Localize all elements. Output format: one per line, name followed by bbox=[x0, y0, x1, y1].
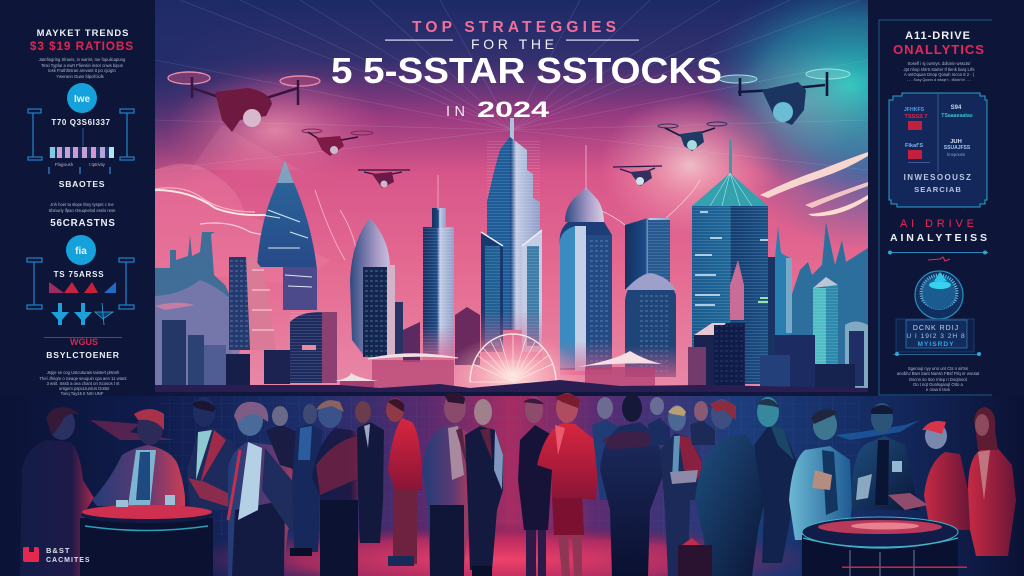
back wall bbox=[0, 396, 1024, 576]
bracket right lower bbox=[119, 258, 134, 309]
drone: small pink bbox=[302, 129, 373, 156]
panel: right sidebar bbox=[879, 20, 992, 395]
heading: ai drive lower: AI DRIVE bbox=[900, 218, 974, 230]
label: sbaotes: SBAOTES bbox=[59, 179, 105, 189]
icon: cyan badge two: fia bbox=[75, 246, 87, 257]
dome pavilion left bbox=[335, 354, 458, 391]
heading: market trends: MAYKET TRENDS bbox=[37, 27, 129, 38]
bracket right bbox=[120, 109, 134, 160]
person: background woman bbox=[648, 397, 670, 445]
chart labels: Ffajyoush bbox=[55, 162, 74, 167]
text block: analytics intro: Jpt nhop shtrtr starter tf tlenk barq Lrfs bbox=[904, 67, 974, 72]
title line: for the: FOR THE bbox=[471, 36, 554, 52]
wall grid bbox=[160, 396, 860, 536]
icon: holographic orb bbox=[915, 271, 963, 319]
title line: in: IN bbox=[446, 104, 465, 120]
text block: market intro: tosk Frathltrsran arevant tt po cjcigtn bbox=[48, 68, 117, 73]
logo: best caemites bbox=[23, 546, 91, 564]
arrow icons bbox=[51, 303, 113, 325]
building: dome tower bbox=[350, 218, 420, 362]
person: man behind with dark suit bbox=[355, 401, 384, 543]
card right stats: S94 bbox=[951, 105, 962, 111]
heading: ratios: $3 $19 RATIOBS bbox=[30, 39, 134, 53]
text block: analysis note: Sgenoqi nyy unn unt Cts n sirtns bbox=[908, 366, 968, 371]
card left stats: Fikaf'S bbox=[905, 143, 923, 149]
building: mid-right towers bbox=[625, 218, 676, 377]
heading: onallytics: ONALLYTICS bbox=[893, 42, 985, 57]
person: blond man with red jacket bbox=[660, 405, 702, 576]
text block: market intro: Tetxi Typfar a nwrt Ffiensin insor cnws bipus bbox=[41, 63, 123, 68]
divider rule bbox=[44, 337, 122, 338]
person: red-haired woman with device bbox=[888, 421, 970, 530]
table left bbox=[80, 495, 213, 576]
bracket left lower bbox=[27, 258, 42, 309]
card left stats: JFHKFS bbox=[904, 107, 925, 113]
person: man in red-dark back view bbox=[312, 400, 367, 576]
label: ts stat: TS 75ARSS bbox=[54, 270, 104, 279]
text block: market intro bbox=[39, 57, 126, 79]
person: background lady bbox=[690, 401, 715, 445]
building: central skyscraper bbox=[481, 118, 542, 360]
text block: secondary intro bbox=[48, 202, 116, 213]
text block: closing note bbox=[39, 370, 127, 396]
text block: closing note: Jspje se cog Ustcuturais taintert plsnsh bbox=[47, 370, 120, 375]
dome pavilion right bbox=[577, 351, 662, 389]
clouds and lightning streaks left bbox=[155, 164, 356, 262]
title line: 5-star stocks: 5 5-SSTAR SSTOCKS bbox=[331, 50, 722, 91]
drones bbox=[168, 69, 850, 188]
card right stats: TSaaaeaatas bbox=[941, 113, 973, 119]
card left stats: TSSSS 7 bbox=[904, 114, 928, 120]
card sublabel: SEARCIAB bbox=[914, 185, 962, 194]
heading: bsylctoener: BSYLCTOENER bbox=[46, 350, 120, 360]
readout box: MYISRDY bbox=[917, 341, 955, 348]
data card bbox=[889, 93, 987, 207]
person: red suit figure with glasses bbox=[537, 393, 599, 576]
readout box bbox=[896, 319, 974, 352]
ferris wheel bbox=[470, 334, 556, 382]
person: man in dark jacket centre front bbox=[228, 402, 307, 576]
crowd scene bbox=[0, 392, 1024, 576]
card left stats bbox=[904, 107, 930, 163]
person: woman in dark dress with glass bbox=[518, 397, 552, 576]
sun glow on horizon bbox=[454, 338, 575, 388]
label: stat figure: T70 Q3S6I337 bbox=[51, 118, 111, 127]
person: man in pale blazer bbox=[465, 399, 503, 576]
accent rule bbox=[842, 566, 967, 568]
distant skyline right bbox=[790, 222, 868, 396]
distant skyline left bbox=[155, 232, 240, 396]
person: background blue suit bbox=[592, 397, 622, 500]
text block: closing note: ontgem pspcLtuniUs Dottst bbox=[59, 386, 110, 391]
foreground silhouette strip bbox=[155, 380, 868, 392]
text block: closing note: Thel Jfniqre o Seaqe seuquin cpa aen 11 wtant bbox=[39, 376, 127, 381]
chart labels: t tptrivtiy bbox=[89, 162, 106, 167]
building: tall bullet tower bbox=[257, 160, 317, 310]
person: teal-lit man in overcoat bbox=[754, 397, 796, 563]
card label: INWESOOUSZ bbox=[904, 173, 972, 182]
building: hexagonal tower bbox=[560, 145, 612, 375]
text block: market intro: Jatefingring Slraeis, in warint, toe fopulicapung bbox=[39, 57, 126, 62]
person: man in dark suit with glasses bbox=[852, 403, 919, 510]
text block: analytics intro: - - - Sosy Qoons d wloqe t - tMosf bf - - - bbox=[907, 78, 972, 82]
logo: best caemites: B&ST bbox=[46, 546, 70, 555]
text block: analytics intro: A ontOquan Dnop Qosah mcoo 8 2 - ) bbox=[904, 72, 975, 77]
person: man in navy suit bbox=[678, 399, 765, 576]
text block: analytics intro: Sosefl i sj cwnrys. ddionin wssctsr bbox=[907, 61, 971, 66]
text block: closing note: Tonq Tay15 It NSI UNF bbox=[61, 391, 104, 396]
person: woman in red blazer right bbox=[968, 407, 1016, 556]
bar chart bbox=[49, 128, 114, 158]
drone: small teal bbox=[658, 122, 727, 151]
text block: analysis note: anobhJ Btwt Sant Nansn FBsf FIlq nr woutat bbox=[897, 371, 980, 376]
person: left man at table bbox=[92, 409, 185, 506]
clouds and lightning streaks right bbox=[602, 152, 868, 226]
drone: large teal bbox=[719, 69, 850, 125]
person: man in light blue blazer bbox=[789, 410, 852, 540]
person: man in dark back view bbox=[600, 394, 665, 576]
person: tall man in suit bbox=[423, 392, 500, 576]
card right stats: SSUAJFSS bbox=[944, 145, 971, 151]
panel: left sidebar bbox=[27, 27, 134, 396]
readout box: DCNK RDIJ bbox=[913, 325, 959, 332]
title line: 2024: 2024 bbox=[477, 97, 550, 122]
person: left man with red lapel bbox=[187, 397, 235, 510]
main title bbox=[331, 19, 722, 122]
person: background man dark bbox=[266, 406, 297, 470]
dark strip above crowd bbox=[155, 392, 868, 396]
divider with nodes bbox=[888, 250, 988, 254]
sidebar frame bbox=[879, 20, 992, 395]
title line: top strategies: TOP STRATEGGIES bbox=[412, 19, 616, 36]
person: far left back view bbox=[20, 407, 94, 576]
divider with nodes lower bbox=[893, 352, 981, 356]
title rule right bbox=[566, 40, 639, 41]
icon: cyan badge two bbox=[66, 235, 96, 265]
drone: small centre-right bbox=[613, 166, 662, 186]
text block: market intro: Ywerann Ouan fdpcifciols bbox=[56, 74, 104, 79]
building: stepped tower left bbox=[224, 256, 276, 388]
foreground blocks left bbox=[162, 312, 337, 386]
drone: pink lower bbox=[358, 170, 410, 188]
heading: analyteiss: AINALYTEISS bbox=[890, 232, 987, 244]
chart labels bbox=[49, 162, 110, 174]
text block: analysis note: Dscnn so Itoo rnlep n Doqtnoot bbox=[909, 377, 968, 382]
trend streak right bbox=[835, 420, 920, 440]
building: side towers right bbox=[775, 226, 864, 386]
label: red tag: WGUS bbox=[70, 337, 98, 347]
building: small dark spire block bbox=[455, 307, 480, 365]
text block: analytics intro bbox=[904, 61, 975, 82]
icon: cyan badge: Iwe bbox=[74, 94, 90, 105]
heading: crastns: 56CRASTNS bbox=[50, 218, 116, 229]
title rule left bbox=[385, 40, 453, 41]
person: man in red jacket bbox=[386, 398, 422, 566]
card right stats: JUH bbox=[950, 139, 962, 145]
building: large cyan-roof tower bbox=[692, 140, 775, 387]
text block: analysis note: Do t nqt Ounlsqanql Otto a bbox=[913, 382, 963, 387]
trend streak left bbox=[90, 420, 175, 440]
text block: analysis note bbox=[897, 366, 980, 392]
text block: closing note: 3 wsit. Sssb a oea chant on Scosos t st bbox=[47, 381, 120, 386]
text block: secondary intro: Sbinuriy lfpan Osuqnelnd esnis rese bbox=[48, 208, 116, 213]
text block: analysis note: e oraa ti tsos bbox=[926, 387, 950, 392]
logo: best caemites: CACMITES bbox=[46, 557, 91, 564]
triangle icons bbox=[49, 282, 116, 293]
table right bbox=[802, 517, 958, 576]
card right stats bbox=[941, 105, 973, 157]
foreground blocks right bbox=[688, 323, 855, 390]
bracket left bbox=[28, 109, 42, 160]
floor glow bbox=[200, 510, 800, 576]
drone: large pink bbox=[168, 72, 320, 170]
hero sky panel bbox=[155, 0, 868, 392]
text block: secondary intro: Jnh hoet ta slope tbny tyspnt c tne bbox=[50, 202, 114, 207]
heading: ai drive: A11-DRIVE bbox=[905, 30, 971, 42]
red pulse mark bbox=[928, 257, 950, 261]
card right stats: hnepouss bbox=[947, 152, 965, 157]
readout box: U I 19I2 3 2H 8 bbox=[906, 333, 966, 340]
building: slim tower bbox=[423, 175, 454, 360]
person: blue suit background bbox=[290, 404, 322, 556]
icon: cyan badge bbox=[67, 83, 97, 113]
